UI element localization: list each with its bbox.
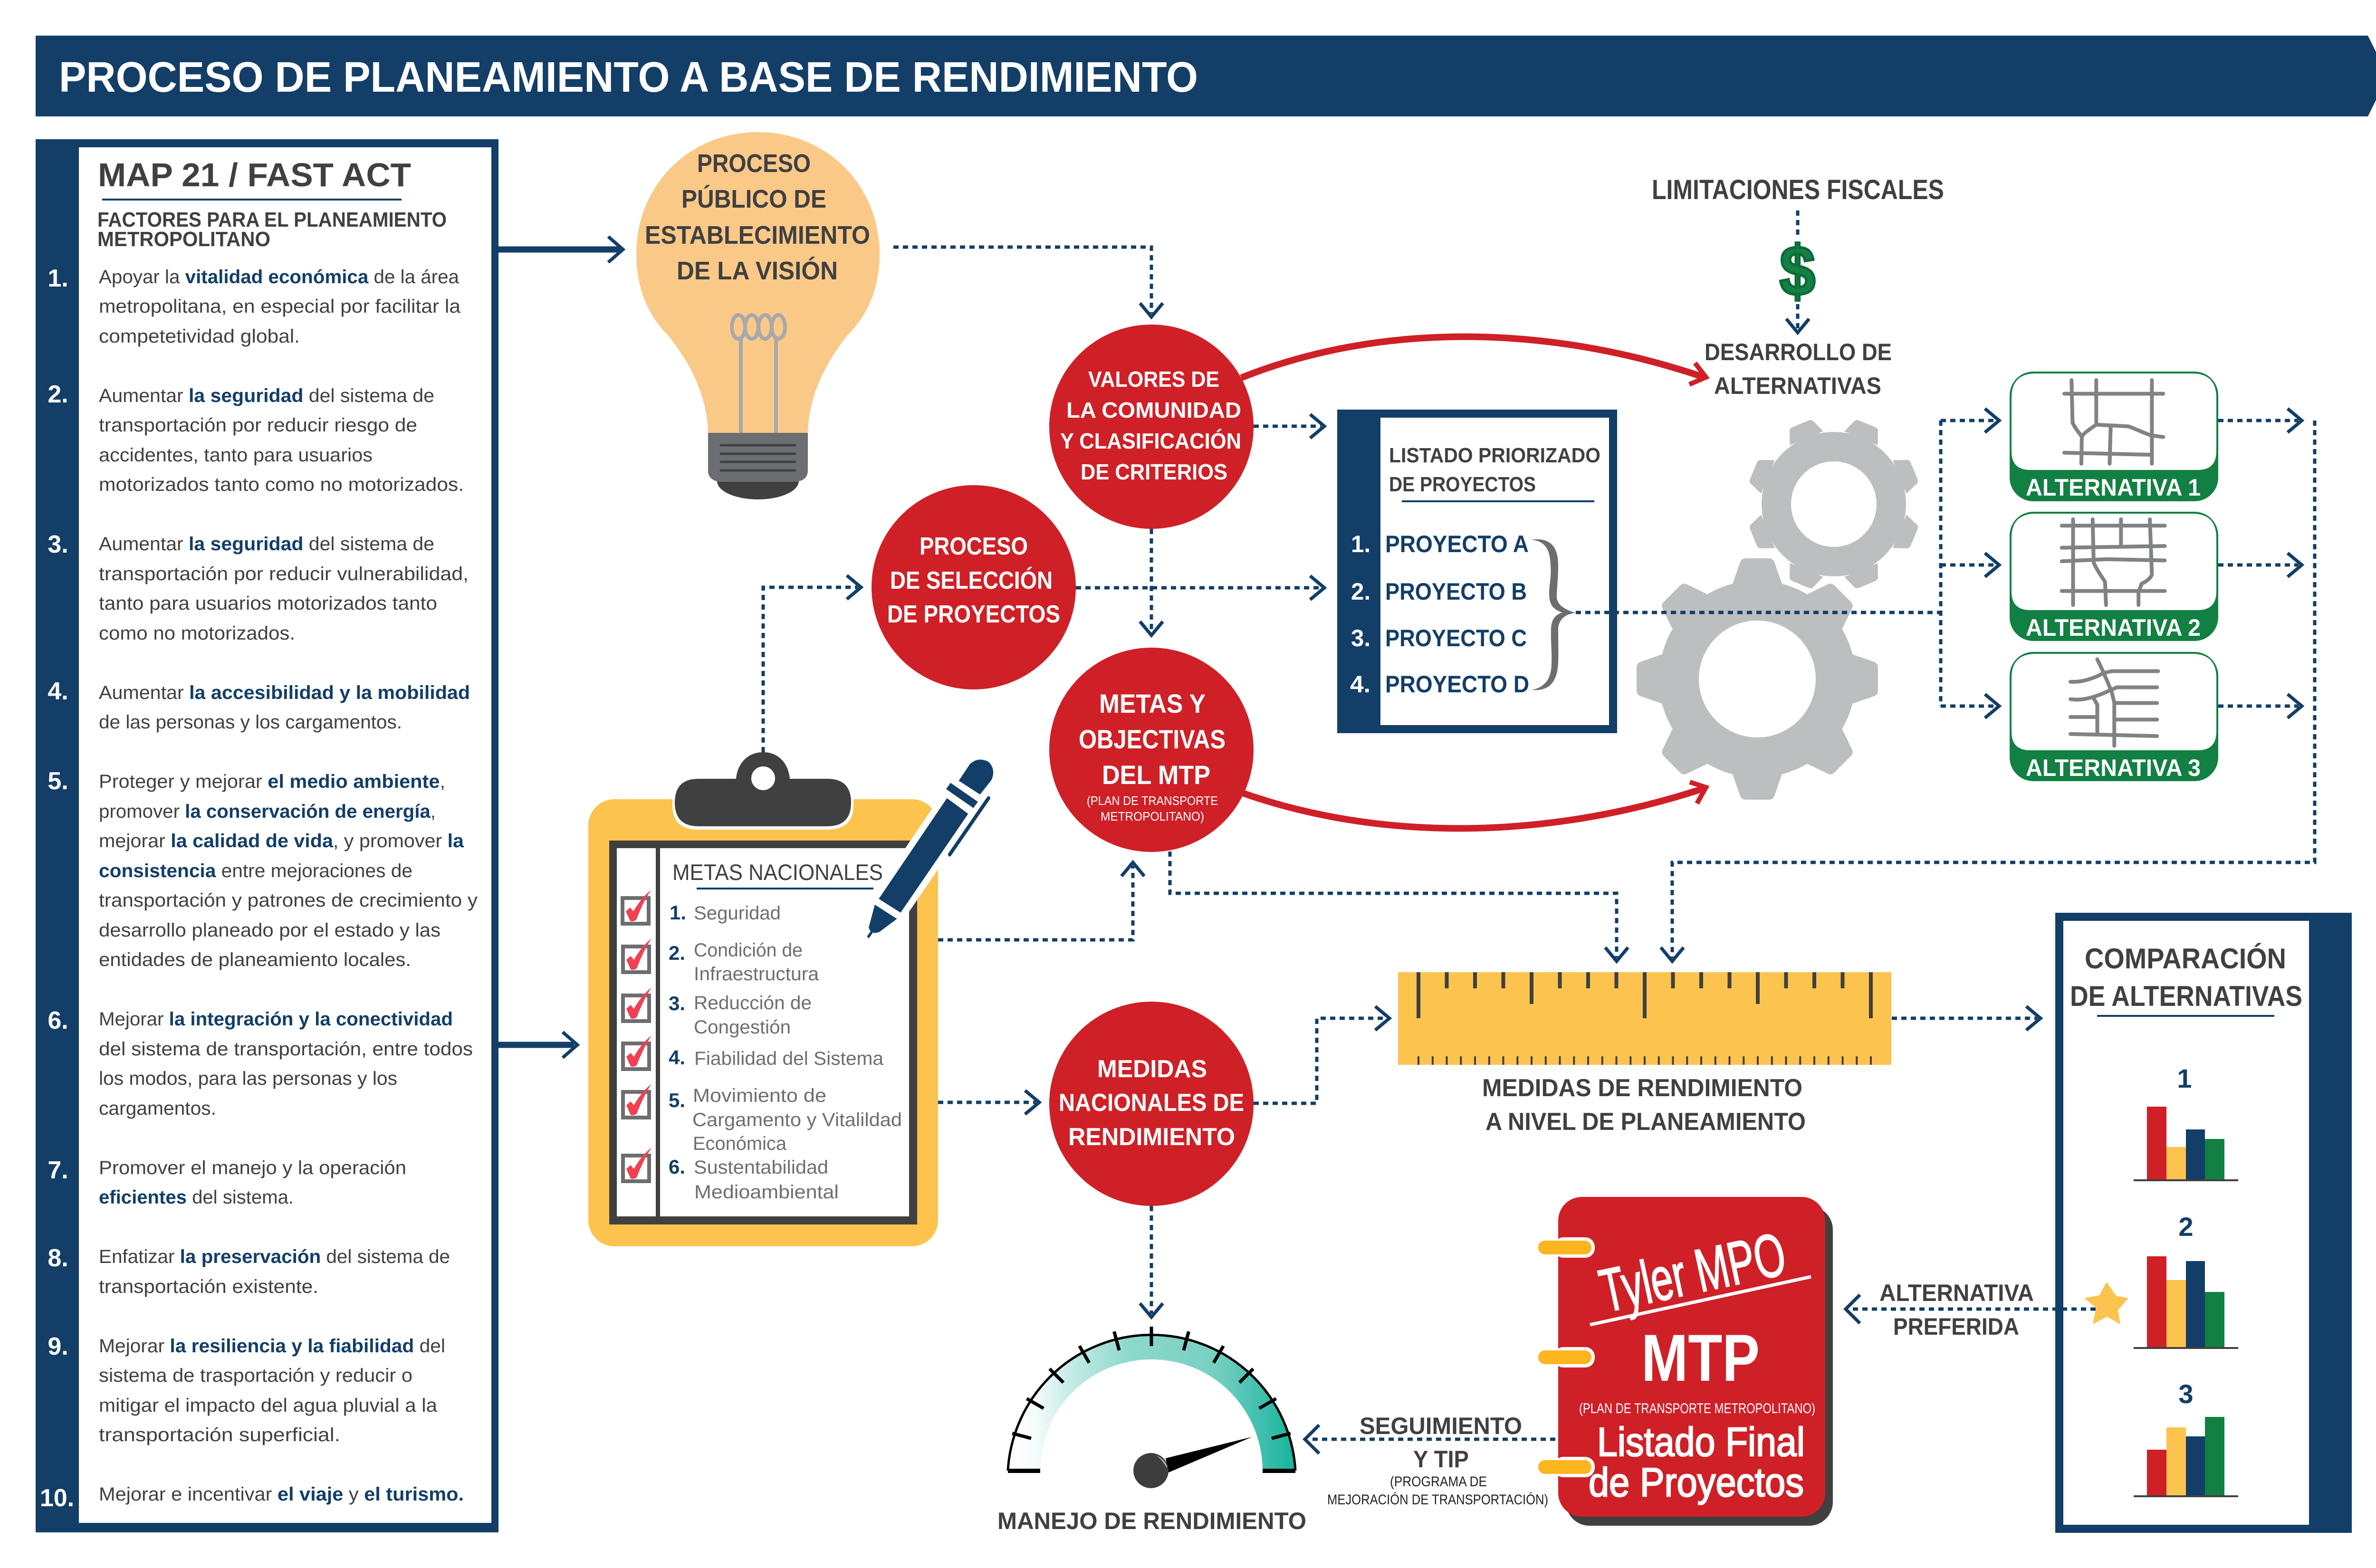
factor numbers: 1. — [48, 265, 68, 292]
factor 5 text: promover la conservación de energía, — [99, 801, 436, 822]
goals list: Fiabilidad del Sistema — [694, 1048, 884, 1069]
circle: national performance measures: RENDIMIENTO — [1068, 1123, 1235, 1151]
arrow: fiscal constraints to alternatives development — [1786, 210, 1809, 333]
factor 6 text: del sistema de transportación, entre todos — [99, 1039, 473, 1060]
arrow: national measures to ruler — [1254, 1006, 1389, 1103]
factor 3 text: Aumentar la seguridad del sistema de — [99, 534, 434, 555]
arrow: panel to clipboard — [498, 1032, 577, 1058]
factor numbers: 5. — [48, 767, 68, 795]
factor numbers: 2. — [48, 381, 68, 408]
circle: MTP goals and objectives: METROPOLITANO) — [1101, 809, 1204, 823]
factor numbers: 6. — [48, 1007, 68, 1034]
icon: MTP book: de Proyectos — [1589, 1460, 1804, 1505]
label: monitoring and TIP: MEJORACIÓN DE TRANSPORTACIÓN) — [1327, 1492, 1548, 1508]
icon: dollar sign: $ — [1780, 232, 1815, 310]
bar chart 2: 2 — [2178, 1212, 2194, 1242]
goals list: 1. — [670, 901, 686, 924]
clipboard heading: METAS NACIONALES — [672, 860, 883, 885]
icon: small gear — [1746, 417, 1921, 592]
title banner — [36, 36, 2376, 116]
icon: project brace — [1531, 539, 1576, 690]
panel: prioritized project list — [1337, 410, 1617, 733]
circle: project selection process: DE PROYECTOS — [887, 601, 1060, 628]
panel: comparison of alternatives: COMPARACIÓN — [2085, 943, 2286, 975]
arrow: project selection to priority list — [1076, 576, 1324, 600]
factor 9 text: transportación superficial. — [99, 1425, 340, 1445]
factor 2 text: Aumentar la seguridad del sistema de — [99, 385, 434, 406]
label: planning-level measures: A NIVEL DE PLANEAMIENTO — [1485, 1108, 1806, 1136]
factor numbers: 7. — [48, 1157, 68, 1184]
goals list: Reducción de — [694, 993, 812, 1013]
factor 5 text: entidades de planeamiento locales. — [99, 949, 411, 970]
factor 5 text: mejorar la calidad de vida , y promover la — [99, 831, 464, 851]
arrow: list through gears to alternatives — [1576, 409, 1999, 718]
factor 2 text — [99, 385, 464, 495]
card: alternativa 2 — [2010, 512, 2218, 641]
goals list: Cargamento y Vitalildad — [692, 1109, 902, 1130]
factor 8 text — [99, 1246, 450, 1297]
icon: large gear — [1637, 558, 1878, 800]
factor 1 text — [99, 267, 461, 347]
icon: light bulb vision — [636, 132, 880, 499]
circle: MTP goals and objectives: DEL MTP — [1102, 760, 1210, 790]
circle: community values: VALORES DE — [1088, 367, 1219, 392]
factor 9 text: mitigar el impacto del agua pluvial a la — [99, 1395, 438, 1416]
arrow: national measures to gauge — [1140, 1206, 1163, 1317]
factor 5 text: transportación y patrones de crecimiento y — [99, 890, 478, 911]
goals list: Congestión — [694, 1017, 791, 1038]
factor 6 text: los modos, para las personas y los — [99, 1068, 397, 1089]
icon: light bulb vision: ESTABLECIMIENTO — [645, 221, 870, 249]
factor 1 text: Apoyar la vitalidad económica de la área — [99, 267, 460, 287]
label: monitoring and TIP: Y TIP — [1413, 1446, 1469, 1472]
bar chart 1 — [2134, 1063, 2238, 1181]
factor 8 text: transportación existente. — [99, 1276, 318, 1297]
card: alternativa 1 — [2010, 372, 2218, 501]
circle: national performance measures: MEDIDAS — [1097, 1055, 1207, 1083]
bar chart 3: 3 — [2178, 1379, 2194, 1409]
label: alternatives development — [1705, 339, 1892, 399]
arrow: clipboard to project selection — [763, 575, 861, 752]
arrow: values to goals circle — [1140, 529, 1163, 635]
circle: community values: LA COMUNIDAD — [1066, 398, 1241, 422]
label: fiscal constraints: LIMITACIONES FISCALES — [1652, 174, 1944, 205]
icon: MTP book: MTP — [1641, 1320, 1760, 1395]
icon: MTP book: Listado Final — [1597, 1420, 1805, 1465]
circle: community values: Y CLASIFICACIÓN — [1060, 429, 1241, 453]
factor 6 text — [99, 1009, 473, 1119]
panel heading — [97, 156, 447, 251]
arrow: goals to gears (red) — [1241, 782, 1706, 828]
arrow: ruler to comparison — [1892, 1006, 2041, 1030]
goals list: 6. — [669, 1156, 685, 1178]
factor 7 text: eficientes del sistema. — [99, 1187, 294, 1208]
arrow: bulb to values circle — [893, 247, 1163, 317]
arrow: panel to vision bulb — [498, 237, 623, 262]
panel: prioritized project list: PROYECTO C — [1385, 625, 1527, 651]
arrow: clipboard to national measures — [938, 1090, 1039, 1114]
goals list — [669, 901, 902, 1203]
factor 3 text — [99, 534, 469, 644]
circle: MTP goals and objectives: OBJECTIVAS — [1079, 724, 1226, 754]
panel: prioritized project list: PROYECTO B — [1385, 578, 1527, 605]
factor 2 text: accidentes, tanto para usuarios — [99, 445, 373, 466]
panel: comparison of alternatives — [2055, 913, 2352, 1533]
factor 5 text — [99, 771, 478, 970]
binder rings — [1538, 1237, 1595, 1477]
icon: light bulb vision: PÚBLICO DE — [681, 185, 826, 213]
factor numbers: 4. — [48, 678, 68, 705]
panel: prioritized project list: PROYECTO A — [1385, 531, 1529, 557]
icon: MTP book: Tyler MPO — [1594, 1220, 1792, 1325]
goals list: Sustentabilidad — [694, 1157, 828, 1178]
circle: national performance measures: NACIONALES DE — [1059, 1089, 1244, 1117]
panel: prioritized project list: 4. — [1350, 671, 1370, 698]
label: alternatives development: ALTERNATIVAS — [1714, 373, 1881, 399]
icon: clipboard with national goals — [588, 752, 993, 1246]
arrow: alternatives to planning measures — [1661, 409, 2315, 961]
icon: pen — [868, 760, 993, 937]
circle: community values: DE CRITERIOS — [1081, 459, 1227, 484]
factor 3 text: tanto para usuarios motorizados tanto — [99, 593, 437, 614]
factor 2 text: motorizados tanto como no motorizados. — [99, 474, 464, 495]
factor 5 text: consistencia entre mejoraciones de — [99, 860, 412, 881]
bar chart 1: 1 — [2177, 1063, 2192, 1093]
icon: MTP book: (PLAN DE TRANSPORTE METROPOLITANO) — [1579, 1401, 1815, 1416]
icon: performance gauge — [1008, 1327, 1295, 1488]
label: preferred alternative: PREFERIDA — [1893, 1313, 2019, 1340]
card: alternativa 2: ALTERNATIVA 2 — [2026, 614, 2201, 641]
label: monitoring and TIP: SEGUIMIENTO — [1360, 1413, 1522, 1439]
title banner: PROCESO DE PLANEAMIENTO A BASE DE RENDIMIENTO — [59, 54, 1198, 101]
arrow: MTP to gauge — [1305, 1425, 1555, 1453]
factor numbers — [40, 265, 74, 1512]
label: preferred alternative — [1879, 1280, 2034, 1340]
icon: ruler — [1398, 972, 1891, 1065]
factor 4 text: Aumentar la accesibilidad y la mobilidad — [99, 682, 470, 703]
panel: prioritized project list: 2. — [1351, 578, 1370, 605]
factor 5 text: desarrollo planeado por el estado y las — [99, 920, 441, 941]
factor numbers: 10. — [40, 1484, 74, 1512]
circle: MTP goals and objectives: (PLAN DE TRANSPORTE — [1087, 794, 1218, 808]
arrow: values to priority list — [1254, 414, 1324, 438]
factor 9 text: sistema de trasportación y reducir o — [99, 1365, 412, 1386]
icon: star — [2084, 1282, 2128, 1324]
bar chart 3 — [2134, 1379, 2238, 1497]
goals list: Condición de — [694, 940, 803, 961]
label: preferred alternative: ALTERNATIVA — [1879, 1280, 2034, 1306]
arrow: goals to planning measures — [1170, 851, 1628, 961]
factor 4 text: de las personas y los cargamentos. — [99, 712, 402, 733]
factor 1 text: metropolitana, en especial por facilitar la — [99, 296, 461, 317]
label: monitoring and TIP — [1327, 1413, 1548, 1508]
panel: comparison of alternatives: DE ALTERNATIVAS — [2070, 980, 2302, 1012]
label: planning-level measures — [1482, 1074, 1806, 1136]
factor 7 text: Promover el manejo y la operación — [99, 1157, 406, 1178]
circle: project selection process: DE SELECCIÓN — [890, 567, 1053, 594]
icon: light bulb vision: DE LA VISIÓN — [677, 257, 838, 285]
factor numbers: 8. — [48, 1244, 68, 1272]
factor 5 text: Proteger y mejorar el medio ambiente , — [99, 771, 445, 792]
checkboxes — [623, 890, 651, 1181]
label: planning-level measures: MEDIDAS DE RENDIMIENTO — [1482, 1074, 1802, 1102]
panel heading: METROPOLITANO — [97, 228, 270, 251]
arrow: values to alternatives development (red) — [1241, 337, 1706, 384]
icon: MTP book — [1538, 1197, 1833, 1526]
card: alternativa 3 — [2010, 652, 2218, 781]
panel: prioritized project list: PROYECTO D — [1385, 671, 1529, 698]
bar chart 2 — [2134, 1212, 2238, 1349]
factor 7 text — [99, 1157, 406, 1208]
goals list: Movimiento de — [693, 1085, 826, 1106]
label: alternatives development: DESARROLLO DE — [1705, 339, 1892, 365]
goals list: 4. — [669, 1046, 685, 1069]
factor 3 text: transportación por reducir vulnerabilidad, — [99, 564, 469, 584]
panel: prioritized project list: LISTADO PRIORIZADO — [1389, 444, 1600, 467]
circle: MTP goals and objectives: METAS Y — [1099, 688, 1206, 718]
card: alternativa 3: ALTERNATIVA 3 — [2026, 755, 2201, 781]
factor numbers: 9. — [48, 1333, 68, 1360]
goals list: Económica — [693, 1133, 787, 1154]
goals list: 3. — [669, 992, 685, 1014]
factor 3 text: como no motorizados. — [99, 623, 295, 644]
factor 4 text — [99, 682, 470, 733]
arrow: clipboard to goals circle — [938, 862, 1144, 940]
panel: prioritized project list: 1. — [1351, 531, 1370, 557]
factor 2 text: transportación por reducir riesgo de — [99, 415, 417, 436]
goals list: Infraestructura — [694, 964, 819, 985]
factor 8 text: Enfatizar la preservación del sistema de — [99, 1246, 450, 1267]
label: monitoring and TIP: (PROGRAMA DE — [1390, 1474, 1487, 1490]
goals list: Medioambiental — [694, 1182, 839, 1203]
factor 10 text: Mejorar e incentivar el viaje y el turismo. — [99, 1484, 464, 1505]
card: alternativa 1: ALTERNATIVA 1 — [2026, 474, 2201, 501]
label: performance management: MANEJO DE RENDIMIENTO — [997, 1508, 1306, 1534]
panel: MAP 21 / FAST ACT factors — [36, 139, 498, 1532]
goals list: 5. — [669, 1089, 685, 1111]
circle: national performance measures — [1049, 1002, 1254, 1206]
circle: project selection process — [872, 485, 1076, 689]
factor 1 text: competetividad global. — [99, 326, 300, 347]
panel: prioritized project list: DE PROYECTOS — [1389, 473, 1536, 496]
circle: project selection process: PROCESO — [920, 533, 1028, 560]
factor 6 text: cargamentos. — [99, 1098, 216, 1119]
arrow: preferred alternative to MTP — [1846, 1295, 2096, 1323]
factor 6 text: Mejorar la integración y la conectividad — [99, 1009, 453, 1030]
icon: light bulb vision: PROCESO — [697, 149, 811, 178]
factor numbers: 3. — [48, 531, 68, 558]
icon: road map 1 — [2064, 380, 2163, 464]
factor 9 text: Mejorar la resiliencia y la fiabilidad del — [99, 1336, 445, 1357]
factor 9 text — [99, 1336, 445, 1445]
panel heading: MAP 21 / FAST ACT — [98, 156, 411, 193]
icon: road map 2 — [2062, 519, 2165, 605]
icon: road map 3 — [2070, 660, 2158, 746]
goals list: 2. — [669, 942, 685, 964]
circle: MTP goals and objectives — [1049, 648, 1254, 852]
circle: community values — [1049, 325, 1254, 529]
panel heading: FACTORES PARA EL PLANEAMIENTO — [97, 208, 447, 231]
panel: prioritized project list: 3. — [1351, 625, 1370, 651]
goals list: Seguridad — [694, 903, 781, 924]
